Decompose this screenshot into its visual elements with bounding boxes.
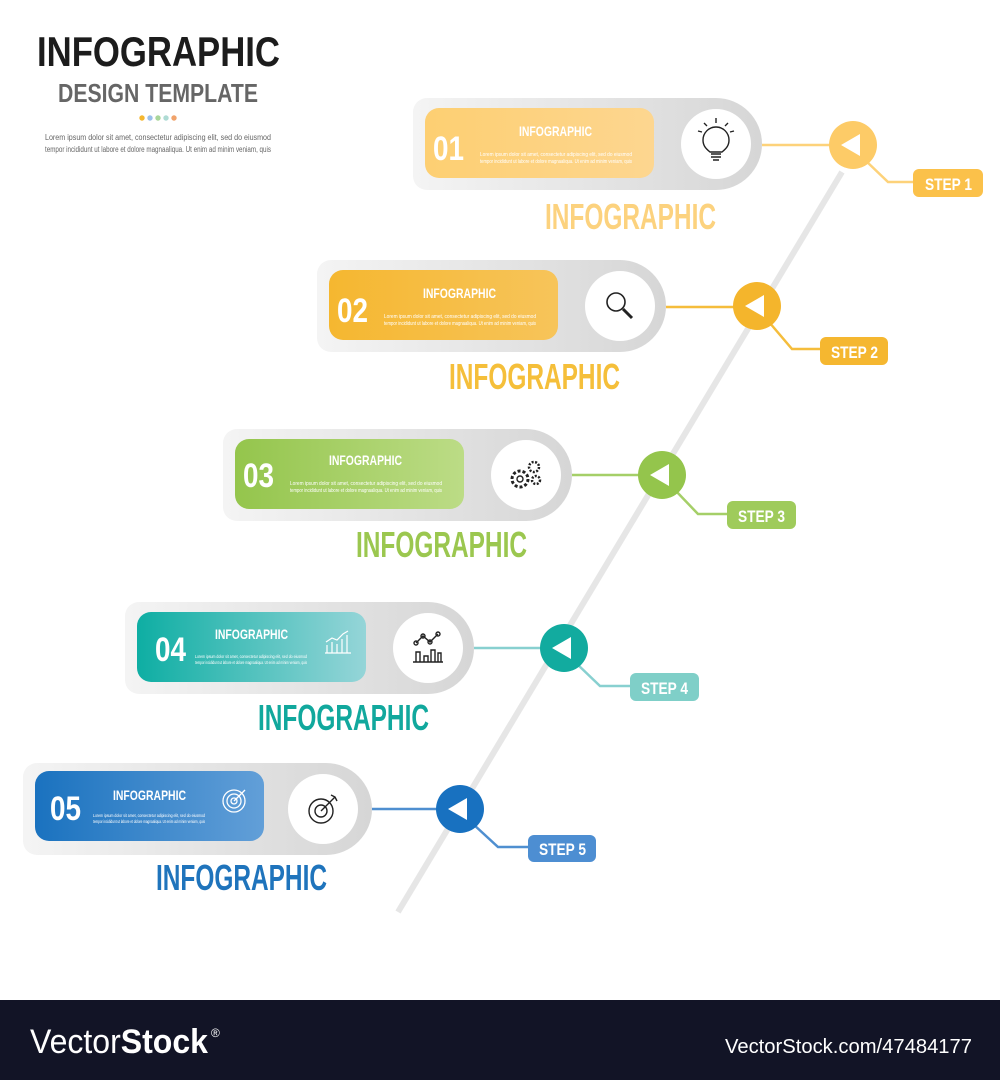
footer bar (0, 1000, 1000, 1080)
title: INFOGRAPHIC (37, 28, 280, 75)
step 3: 03 (243, 457, 274, 495)
step 1: STEP 1 (925, 175, 972, 194)
step 4: INFOGRAPHIC (258, 697, 429, 738)
step 3: tempor incididunt ut labore et dolore magnaaliqua. Ut enim ad minim veniam, quis (290, 488, 442, 494)
icon: chart (413, 632, 443, 662)
step 2: 02 (337, 292, 368, 330)
step 1: INFOGRAPHIC (519, 123, 592, 139)
title: DESIGN TEMPLATE (58, 78, 258, 108)
step 4: 04 (155, 631, 186, 669)
icon: small target (223, 790, 245, 812)
step 2: INFOGRAPHIC (449, 356, 620, 397)
step 5: Lorem ipsum dolor sit amet, consectetur adipiscing elit, sed do eiusmod (93, 813, 205, 818)
step 4: Lorem ipsum dolor sit amet, consectetur adipiscing elit, sed do eiusmod (195, 654, 307, 659)
step 1 (413, 98, 983, 237)
step 2: tempor incididunt ut labore et dolore magnaaliqua. Ut enim ad minim veniam, quis (384, 321, 536, 327)
icon: magnifier (607, 293, 632, 318)
step 1: Lorem ipsum dolor sit amet, consectetur adipiscing elit, sed do eiusmod (480, 152, 632, 158)
step 5: INFOGRAPHIC (156, 857, 327, 898)
footer bar: ® (211, 1026, 220, 1040)
icon: lightbulb (698, 118, 734, 160)
step 4: tempor incididunt ut labore et dolore magnaaliqua. Ut enim ad minim veniam, quis (195, 660, 308, 665)
step 5: INFOGRAPHIC (113, 787, 186, 803)
icon: target (309, 795, 337, 823)
intro text: tempor incididunt ut labore et dolore magnaaliqua. Ut enim ad minim veniam, quis (45, 145, 271, 154)
step 2: STEP 2 (831, 343, 878, 362)
decorative dots (139, 115, 177, 121)
step 3 (223, 429, 796, 565)
step 5: tempor incididunt ut labore et dolore magnaaliqua. Ut enim ad minim veniam, quis (93, 819, 206, 824)
step 3: INFOGRAPHIC (356, 524, 527, 565)
timeline stem (398, 172, 842, 912)
icon: gears (512, 462, 540, 487)
step 5: STEP 5 (539, 840, 586, 859)
step 3: INFOGRAPHIC (329, 452, 402, 468)
step 5 (23, 763, 596, 898)
step 1: INFOGRAPHIC (545, 196, 716, 237)
step 4 (125, 602, 699, 738)
step 2 (317, 260, 888, 397)
footer bar: VectorStock.com/47484177 (725, 1036, 972, 1058)
step 2: Lorem ipsum dolor sit amet, consectetur adipiscing elit, sed do eiusmod (384, 314, 536, 320)
intro text (45, 133, 271, 154)
step 4: INFOGRAPHIC (215, 626, 288, 642)
step 3: Lorem ipsum dolor sit amet, consectetur adipiscing elit, sed do eiusmod (290, 481, 442, 487)
step 1: tempor incididunt ut labore et dolore magnaaliqua. Ut enim ad minim veniam, quis (480, 159, 632, 165)
step 2: INFOGRAPHIC (423, 285, 496, 301)
icon: small chart (325, 631, 351, 653)
step 1: 01 (433, 130, 464, 168)
footer bar: VectorStock (30, 1023, 208, 1061)
step 4: STEP 4 (641, 679, 688, 698)
step 5: 05 (50, 790, 81, 828)
intro text: Lorem ipsum dolor sit amet, consectetur adipiscing elit, sed do eiusmod (45, 133, 271, 142)
title (37, 28, 280, 108)
step 3: STEP 3 (738, 507, 785, 526)
